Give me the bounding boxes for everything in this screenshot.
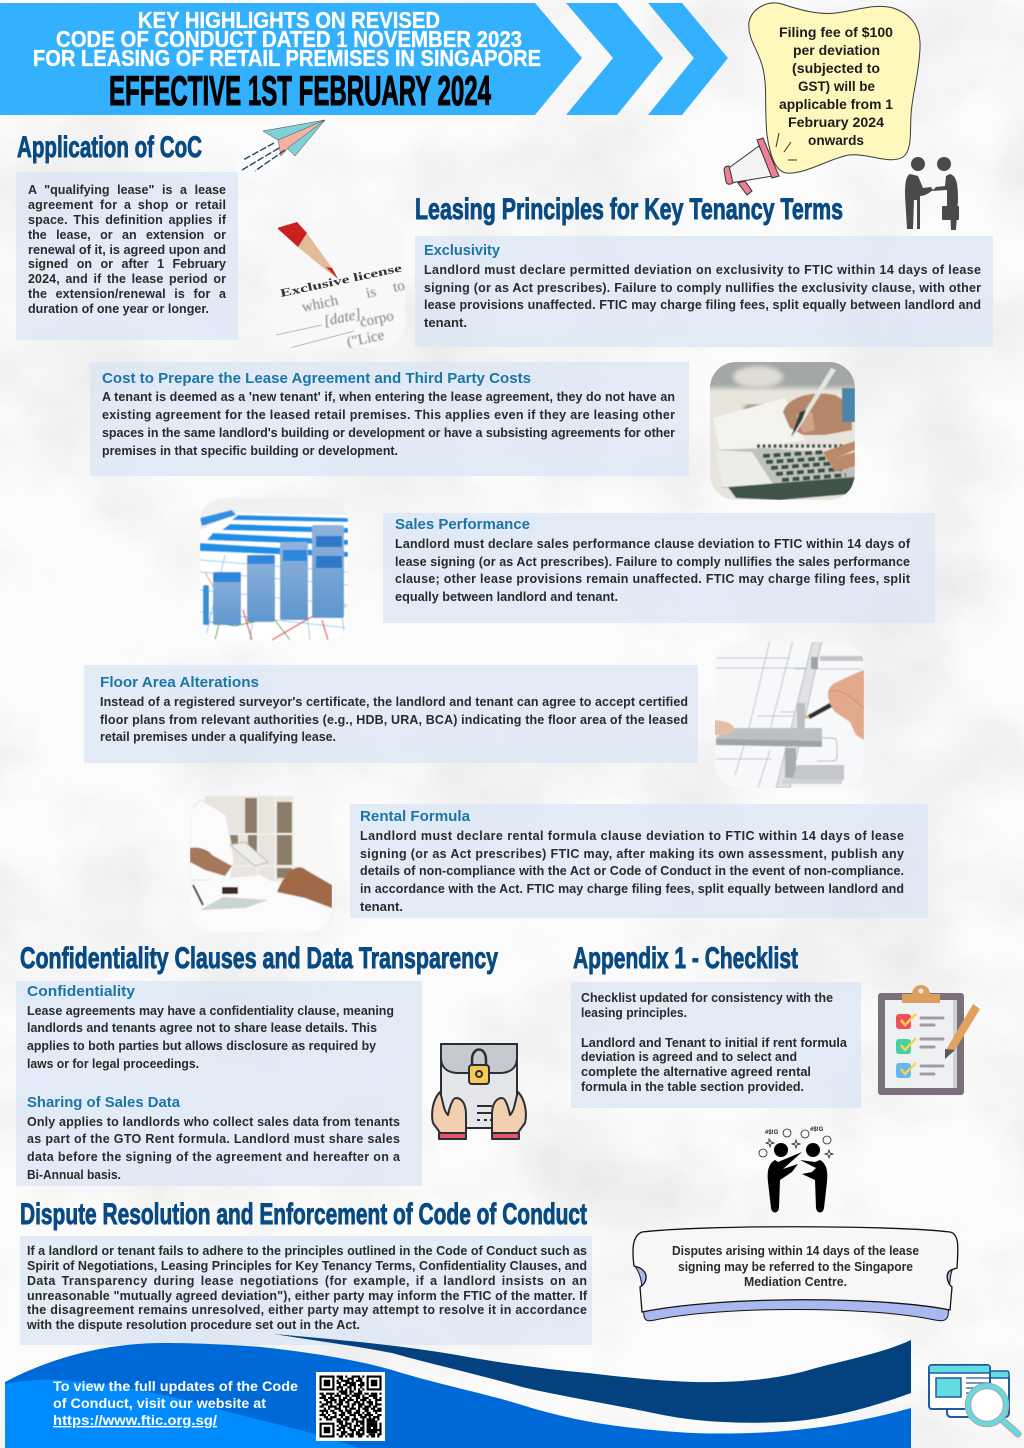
panel: dispute resolution: with the dispute resolution procedure set out in the Act.: [26, 1318, 360, 1332]
panel: application of CoC: [16, 172, 238, 340]
panel: application of CoC: A "qualifying lease" is a lease: [28, 183, 226, 197]
panel: exclusivity: Exclusivity: [424, 242, 501, 259]
panel: confidentiality and sharing: applies to both parties but allows disclosure as required by: [27, 1039, 376, 1053]
panel: cost to prepare: Cost to Prepare the Lease Agreement and Third Party Costs: [102, 370, 531, 387]
panel: exclusivity: tenant.: [424, 316, 467, 330]
panel: appendix checklist: complete the alternative agreed rental: [581, 1065, 811, 1079]
footer link text: of Conduct, visit our website at: [53, 1395, 266, 1411]
panel: rental formula: tenant.: [360, 900, 403, 914]
callout: filing fee: February 2024: [788, 115, 885, 130]
icon: arguing figures: #$!G: [765, 1130, 779, 1136]
chevron 3: [648, 3, 728, 115]
photo: pencil on exclusive license: which: [301, 293, 340, 316]
panel: rental formula: details of non-compliance with the Act or Code of Conduct in the event of non-compliance.: [360, 864, 904, 878]
panel: sales performance: [383, 513, 935, 623]
icon: clipboard checklist: [878, 985, 980, 1095]
callout: filing fee: Filing fee of $100: [779, 25, 893, 40]
panel: exclusivity: lease provisions unaffected. FTIC may charge filing fees, split equally between landlord and: [424, 298, 981, 312]
photo: pencil on exclusive license: ("Lice: [346, 327, 386, 351]
heading: dispute resolution: Dispute Resolution and Enforcement of Code of Conduct: [20, 1198, 587, 1231]
panel: floor area alterations: Instead of a registered surveyor's certificate, the landlord and tenant can agree to accept certified: [100, 695, 688, 709]
panel: sales performance: lease signing (or as Act prescribes). Failure to comply nullifies the sales performance: [395, 555, 910, 569]
panel: appendix checklist: formula in the table section provided.: [581, 1080, 804, 1094]
panel: application of CoC: the extension/renewal is for a: [28, 287, 227, 301]
title: KEY HIGHLIGHTS ON REVISED: [138, 7, 440, 33]
panel: dispute resolution: [20, 1236, 592, 1345]
panel: appendix checklist: leasing principles.: [581, 1006, 687, 1020]
panel: application of CoC: the lease, or an extension or: [28, 228, 226, 242]
bars: [203, 525, 344, 625]
photo: consultation with calculator: [190, 796, 332, 916]
panel: rental formula: signing (or as Act prescribes) FTIC may, after making its own assessment, publish any: [360, 847, 904, 861]
footer link text: [53, 1378, 298, 1428]
panel: cost to prepare: premises in that specific building or development.: [102, 444, 398, 458]
callout: filing fee: onwards: [808, 133, 864, 148]
panel: appendix checklist: [571, 982, 861, 1108]
callout ribbon: disputes: Disputes arising within 14 days of the lease: [672, 1244, 919, 1258]
title: CODE OF CONDUCT DATED 1 NOVEMBER 2023: [56, 26, 522, 52]
panel: exclusivity: Landlord must declare permitted deviation on exclusivity to FTIC within 14 days of lease: [424, 263, 981, 277]
panel: rental formula: Landlord must declare rental formula clause deviation to FTIC within 14 days of lease: [360, 829, 904, 843]
panel: rental formula: [350, 804, 928, 918]
panel: confidentiality and sharing: Confidentiality: [27, 983, 136, 1000]
panel: appendix checklist: deviation is agreed and to select and: [581, 1050, 797, 1064]
panel: application of CoC: agreement for a shop or retail: [28, 198, 226, 212]
panel: application of CoC: space. This definition applies if: [28, 213, 227, 227]
photo: pencil on exclusive license: corpo: [359, 308, 395, 331]
effective date: EFFECTIVE 1ST FEBRUARY 2024: [109, 67, 491, 114]
callout: filing fee: GST) will be: [798, 79, 875, 94]
panel: dispute resolution: the disagreement remains unresolved, either party may attempt to resolve it in accordance: [27, 1303, 587, 1317]
panel: exclusivity: [415, 236, 993, 347]
icon: arguing figures: [759, 1127, 833, 1212]
heading: Application of CoC: Application of CoC: [17, 131, 202, 164]
ruler: [716, 728, 822, 742]
callout ribbon: disputes: Mediation Centre.: [744, 1275, 847, 1289]
photo: pencil on exclusive license: [date],: [323, 306, 366, 330]
panel: sales performance: equally between landlord and tenant.: [395, 590, 618, 604]
callout: filing fee: (subjected to: [792, 61, 880, 76]
panel: dispute resolution: If a landlord or tenant fails to adhere to the principles outlined in the Code of Conduct such as: [27, 1244, 587, 1258]
chevron 2: [566, 3, 663, 115]
panel: cost to prepare: A tenant is deemed as a 'new tenant' if, when entering the lease agreement, they do not have an: [102, 390, 675, 404]
icon: confidential envelope with hands: [432, 1044, 526, 1139]
panel: application of CoC: duration of one year or longer.: [28, 302, 209, 316]
photo: hand with ruler on floor plan: [714, 640, 864, 788]
panel: exclusivity: signing (or as Act prescribes). Failure to comply nullifies the exclusivity clause, with other: [424, 281, 981, 295]
heading: appendix: Appendix 1 - Checklist: [573, 942, 798, 975]
icon: paper plane: [242, 120, 325, 171]
panel: confidentiality and sharing: laws or for legal proceedings.: [27, 1057, 199, 1071]
heading: leasing principles: Leasing Principles for Key Tenancy Terms: [415, 193, 843, 226]
panel: confidentiality and sharing: data before the signing of the agreement and hereafter on a: [27, 1150, 401, 1164]
panel: confidentiality and sharing: landlords and tenants agree not to share lease details. This: [27, 1021, 377, 1035]
panel: cost to prepare: existing agreement for the leased retail premises. This applies even if they are leasing other: [102, 408, 675, 422]
photo: pencil on exclusive license: Exclusive license: [279, 262, 403, 300]
panel: floor area alterations: [84, 665, 698, 763]
photo: pencil on exclusive license: is: [365, 284, 378, 302]
photo: calculator and pen: [705, 358, 860, 500]
panel: dispute resolution: Spirit of Negotiations, Leasing Principles for Key Tenancy Terms, Confidentiality Clauses, and: [27, 1259, 587, 1273]
title: [33, 7, 541, 114]
footer link text: To view the full updates of the Code: [53, 1378, 298, 1394]
panel: floor area alterations: Floor Area Alterations: [100, 674, 259, 691]
panel: appendix checklist: Checklist updated for consistency with the: [581, 991, 833, 1005]
title: FOR LEASING OF RETAIL PREMISES IN SINGAPORE: [33, 45, 541, 71]
panel: confidentiality and sharing: Bi-Annual basis.: [27, 1168, 121, 1182]
icon: handshake: [905, 157, 959, 230]
callout: filing fee: [749, 3, 920, 173]
panel: sales performance: Sales Performance: [395, 516, 530, 533]
photo: pencil on exclusive license: to: [392, 278, 406, 296]
footer link text: https://www.ftic.org.sg/: [53, 1412, 217, 1428]
callout: filing fee: applicable from 1: [779, 97, 893, 112]
panel: dispute resolution: unreasonable "mutually agreed deviation"), either party may inform the FTIC of the matter. If: [27, 1289, 588, 1303]
panel: rental formula: in accordance with the Act. FTIC may charge filing fees, split equally between landlord and: [360, 882, 904, 896]
panel: confidentiality and sharing: Only applies to landlords who collect sales data from tenants: [27, 1115, 400, 1129]
footer wave: [5, 1334, 911, 1448]
panel: rental formula: Rental Formula: [360, 808, 471, 825]
icon: arguing figures: #$!G: [810, 1127, 824, 1133]
QR code: [316, 1372, 385, 1441]
panel: application of CoC: 2024, and if the lease period or: [28, 272, 226, 286]
sub-heading: sharing of sales data: Sharing of Sales Data: [27, 1094, 181, 1111]
panel: confidentiality and sharing: as part of the GTO Rent formula. Landlord must share sales: [27, 1132, 400, 1146]
panel: application of CoC: renewal of it, is agreed upon and: [28, 243, 226, 257]
panel: cost to prepare: spaces in the same landlord's building or development or have a subsisting agreements for other: [102, 426, 675, 440]
photo: 3D bar chart: [200, 498, 348, 641]
panel: floor area alterations: floor plans from relevant authorities (e.g., HDB, URA, BCA) indicating the floor area of the leased: [100, 713, 688, 727]
panel: confidentiality and sharing: Lease agreements may have a confidentiality clause, meaning: [27, 1004, 394, 1018]
panel: sales performance: Landlord must declare sales performance clause deviation to FTIC within 14 days of: [395, 537, 911, 551]
panel: application of CoC: signed on or after 1 February: [28, 257, 226, 271]
panel: dispute resolution: Data Transparency during lease negotiations (for example, if a landlord insists on an: [27, 1274, 587, 1288]
callout ribbon: disputes: signing may be referred to the Singapore: [678, 1260, 913, 1274]
panel: sales performance: clause; other lease provisions remain unaffected. FTIC may charge filing fees, split: [395, 572, 911, 586]
navy swoosh: [274, 1334, 911, 1423]
callout ribbon: disputes: [633, 1227, 958, 1321]
icon: megaphone: [724, 133, 797, 195]
panel: floor area alterations: retail premises under a qualifying lease.: [100, 730, 336, 744]
header banner arrow: [0, 3, 663, 115]
heading: confidentiality: Confidentiality Clauses and Data Transparency: [20, 942, 498, 975]
panel: cost to prepare: [90, 362, 689, 476]
photo: pencil on exclusive license: [272, 220, 406, 351]
callout: filing fee: per deviation: [793, 43, 880, 58]
icon: web search magnifier: [929, 1365, 1018, 1434]
panel: appendix checklist: Landlord and Tenant to initial if rent formula: [581, 1036, 848, 1050]
panel: confidentiality and sharing: [16, 981, 422, 1186]
